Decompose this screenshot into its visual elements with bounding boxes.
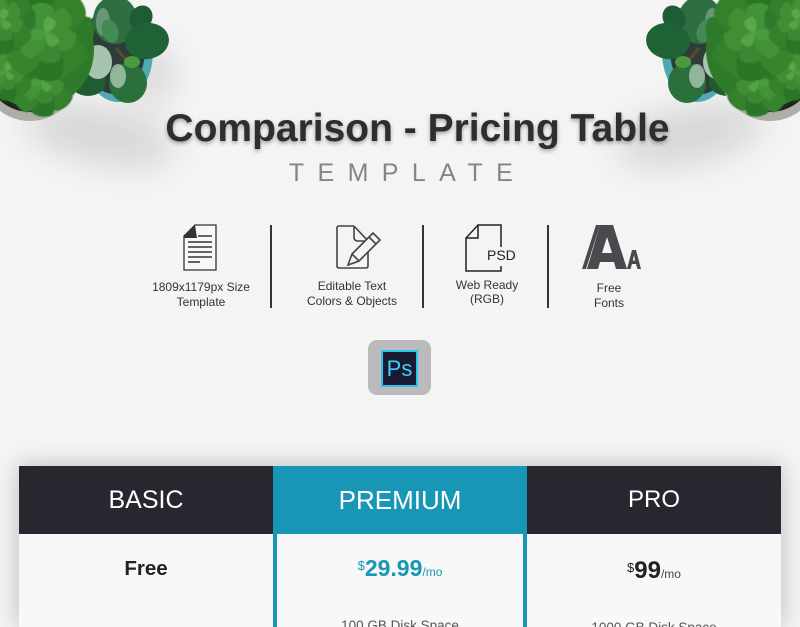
right teal plant [644,0,745,103]
icon: fonts [582,225,641,269]
header: basic: BASIC [108,486,184,514]
left basil plant [0,0,94,121]
icon: edit document [336,225,381,269]
right plants shadow [610,94,770,176]
icon: A4 document [183,224,217,271]
icon: Photoshop badge: Ps [387,356,412,381]
subtitle: TEMPLATE [289,159,526,187]
caption: fonts: Free [597,281,621,295]
icon: Photoshop badge [368,340,431,395]
price: pro: $99/mo [627,557,681,584]
caption: size: 1809x1179px Size [152,280,250,294]
premium column border [273,534,527,627]
caption: editable: Colors & Objects [307,294,397,308]
caption: fonts: Fonts [594,296,624,310]
left teal plant [70,0,171,103]
price: premium: $29.99/mo [358,555,442,581]
header: pro [527,466,781,534]
left plants shadow [20,47,180,176]
caption: web ready: Web Ready [456,278,518,292]
header: pro: PRO [628,486,680,513]
caption: editable [307,279,397,308]
title: Comparison - Pricing Table [165,107,670,150]
pricing table [19,466,781,627]
caption: size: Template [177,295,225,309]
price: basic: Free [124,557,168,580]
caption: web ready [456,278,518,306]
caption: editable: Editable Text [318,279,386,293]
caption: web ready: (RGB) [470,292,504,306]
caption: size [152,280,250,309]
header: premium [273,466,527,534]
right basil plant [706,0,800,121]
header: basic [19,466,273,534]
dividers [270,225,272,308]
icon: PSD file [465,224,516,272]
header: premium: PREMIUM [339,485,461,515]
caption: fonts [594,281,624,310]
icon: PSD file: PSD [487,247,516,263]
